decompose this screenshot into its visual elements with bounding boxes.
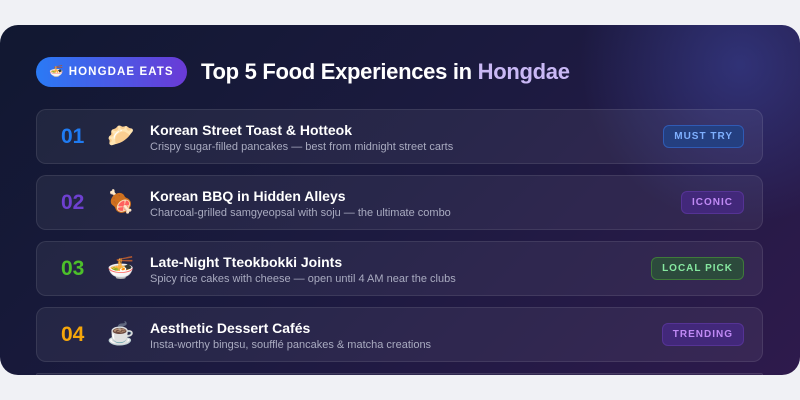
title: Top 5 Food Experiences in Hongdae <box>201 59 570 84</box>
row 01 <box>36 109 763 164</box>
row 04: ☕ <box>107 321 134 346</box>
row 01: 🥟 <box>107 123 134 148</box>
row 03 <box>36 241 763 296</box>
row 02: ICONIC <box>692 197 733 208</box>
row 02 <box>36 175 763 230</box>
row 05 (clipped) <box>36 373 763 375</box>
badge: Hongdae Eats: 🍜 HONGDAE EATS <box>49 66 174 78</box>
row 04: Aesthetic Dessert Cafés <box>150 320 310 336</box>
row 04 <box>36 307 763 362</box>
row 02: 02 <box>61 191 84 214</box>
row 01: Korean Street Toast & Hotteok <box>150 122 352 138</box>
row 03: Late-Night Tteokbokki Joints <box>150 254 342 270</box>
badge: Hongdae Eats <box>36 57 187 87</box>
row 02: Charcoal-grilled samgyeopsal with soju — the ultimate combo <box>150 207 451 219</box>
row 04: 04 <box>61 323 84 346</box>
row 03: 03 <box>61 257 84 280</box>
row 01: Crispy sugar-filled pancakes — best from midnight street carts <box>150 141 453 153</box>
row 04: TRENDING <box>673 329 733 340</box>
row 02: 🍖 <box>107 189 134 214</box>
row 01: MUST TRY <box>674 131 733 142</box>
row 03: Spicy rice cakes with cheese — open until 4 AM near the clubs <box>150 273 456 285</box>
row 03: LOCAL PICK <box>662 263 733 274</box>
row 02: Korean BBQ in Hidden Alleys <box>150 188 346 204</box>
row 04: Insta-worthy bingsu, soufflé pancakes & matcha creations <box>150 339 431 351</box>
row 03: 🍜 <box>107 255 134 280</box>
row 01: 01 <box>61 125 84 148</box>
